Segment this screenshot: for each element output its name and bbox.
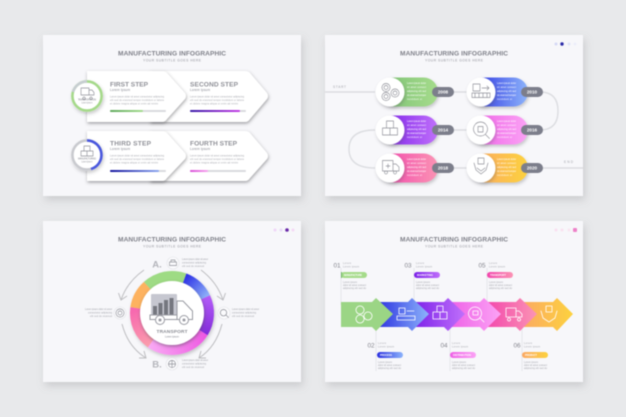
segment: green (144, 271, 186, 290)
card: fourth step (150, 131, 268, 181)
card: second step: SECOND STEP (190, 82, 239, 88)
item: 2018: Lorem ipsum dolor (407, 158, 426, 161)
callout: right magnifier: consectetur adipiscing (232, 312, 257, 314)
callout: 03 (404, 262, 440, 290)
callout: 02: dolor sit amet consect (378, 364, 401, 367)
title: panel 4: MANUFACTURING INFOGRAPHIC (400, 236, 508, 244)
item: 2020: 2020 (527, 166, 538, 171)
segment: purple (198, 295, 214, 335)
panel: arrow process (325, 221, 583, 382)
arrow 6: yellow (520, 298, 573, 331)
vertical leader lines (341, 268, 522, 371)
page dots: panel 3 (274, 228, 294, 232)
card: second step (150, 71, 268, 122)
callout: 02: 02 (367, 342, 375, 350)
item: 2010: Lorem ipsum dolor (497, 82, 516, 85)
callout: 02: Lorem ipsum (378, 346, 394, 348)
callout: 05: Lorem ipsum (489, 266, 505, 268)
item: 2008: do eiusmod tempor (407, 94, 426, 97)
callout: 05: TRANSPORT (490, 273, 506, 277)
item: 2008 (376, 78, 454, 106)
card: second step: Lorem Ipsum (190, 88, 210, 92)
card: first step (87, 71, 186, 122)
item: 2010: 2010 (527, 90, 538, 95)
badge: manufacturing: Lorem ipsum (82, 160, 93, 164)
item: 2020: Lorem ipsum dolor (497, 158, 516, 161)
icon: truck with bars (150, 294, 192, 324)
callout: 03: Lorem ipsum (416, 281, 430, 284)
item: 2018: 2018 (438, 166, 449, 171)
segment: blue (183, 274, 210, 300)
callout: 01: 01 (333, 262, 341, 270)
item: 2020: do eiusmod tempor (497, 170, 516, 173)
card: third step: et dolore magna aliqua ut enim ad minim (110, 162, 158, 164)
card: second step: Lorem ipsum dolor sit amet consectetur adipiscing (190, 96, 245, 98)
item: 2010: sit amet consect (497, 86, 516, 89)
card: second step: et dolore magna aliqua ut enim ad minim (190, 102, 238, 106)
item: 2014: sit amet consect (407, 124, 426, 127)
callout: 02: Lorem ipsum (378, 361, 392, 364)
callout: 03: adipiscing elit sed do (416, 287, 440, 290)
card: fourth step: elit sed do eiusmod tempor incididunt ut labore (190, 158, 245, 161)
item: 2016: Lorem ipsum dolor (497, 120, 516, 123)
callout: 02 (367, 342, 403, 370)
callout: left gear: Lorem ipsum dolor sit amet (85, 308, 112, 311)
item: 2018 (376, 154, 454, 182)
callout: A: A. (152, 260, 162, 270)
callout: 06: Lorem ipsum (524, 361, 538, 364)
arrow 1: green (341, 298, 393, 331)
page dots: panel 4 (554, 228, 577, 232)
timeline connector (325, 92, 583, 168)
subtitle: panel 4: YOUR SUBTITLE GOES HERE (425, 244, 484, 248)
callout: 05: Lorem ipsum (489, 281, 503, 284)
item: 2016: incididunt ut (497, 136, 512, 139)
icon: conveyor (397, 308, 415, 320)
callout: 04: adipiscing elit sed do (452, 367, 476, 370)
item: 2008: sit amet consect (407, 86, 426, 89)
callout: 04: 04 (440, 342, 448, 350)
item: 2008: Lorem ipsum dolor (407, 82, 426, 85)
center label: Lorem ipsum (165, 334, 179, 338)
callout: 01: adipiscing elit sed do (343, 287, 367, 290)
title: panel 2: MANUFACTURING INFOGRAPHIC (400, 50, 508, 58)
arrow 2: blue (376, 298, 429, 331)
item: 2014: do eiusmod tempor (407, 132, 426, 135)
item: 2018: do eiusmod tempor (407, 170, 426, 173)
callout: left gear: consectetur adipiscing (88, 312, 113, 314)
segment: magenta (148, 329, 208, 355)
callout: 05 (478, 262, 513, 290)
badge: manufacturing: MANUFACTURING (78, 158, 96, 160)
callout: B (152, 358, 208, 370)
callout: 05: 05 (478, 262, 486, 270)
callout: A: consectetur adipiscing (182, 262, 207, 264)
item: 2008: incididunt ut (407, 98, 422, 101)
item: 2020: incididunt ut (497, 174, 512, 177)
card: fourth step: et dolore magna aliqua ut enim ad minim (190, 162, 238, 164)
title: panel 3: MANUFACTURING INFOGRAPHIC (118, 236, 226, 244)
item: 2018: sit amet consect (407, 162, 426, 165)
callout: 04: Lorem (452, 342, 460, 345)
callout: 01 (333, 262, 367, 290)
icon: gears (356, 306, 372, 323)
card: third step: Lorem Ipsum (110, 147, 130, 151)
arrow: top right (201, 270, 226, 300)
callout: 06: 06 (513, 342, 521, 350)
card: first step: elit sed do eiusmod tempor incididunt ut labore (110, 99, 165, 102)
item: 2008: 2008 (438, 90, 449, 95)
callout: 06: Lorem (524, 342, 532, 345)
badge: manufacturing (71, 139, 103, 171)
center disc (140, 281, 204, 345)
item: 2008: adipiscing elit sed (407, 90, 427, 93)
panel: four steps (43, 35, 301, 196)
callout: 04: dolor sit amet consect (452, 364, 475, 367)
label: end: END (564, 160, 574, 164)
callout: 04: Lorem ipsum (452, 346, 468, 348)
callout: A: elit sed do eiusmod (182, 265, 205, 268)
badge: transportation: Lorem ipsum (82, 102, 93, 104)
item: 2010 (466, 78, 543, 106)
subtitle: panel 1: YOUR SUBTITLE GOES HERE (143, 58, 202, 62)
panel: transport cycle (43, 221, 301, 382)
callout: 01: MANUFACTURE (344, 273, 362, 277)
item: 2020 (466, 154, 543, 182)
callout: 04: DISTRIBUTION (453, 353, 471, 357)
title: panel 1: MANUFACTURING INFOGRAPHIC (118, 50, 226, 58)
callout: left gear: elit sed do eiusmod (90, 315, 113, 318)
label: start: START (333, 85, 346, 89)
item: 2016: adipiscing elit sed (497, 128, 517, 131)
item: 2010: do eiusmod tempor (497, 94, 516, 97)
callout: B: B. (152, 360, 162, 370)
page dots: panel 2 (554, 42, 576, 46)
callout: 04 (440, 342, 476, 370)
callout: 02: adipiscing elit sed do (378, 367, 402, 370)
item: 2014: adipiscing elit sed (407, 128, 427, 131)
card: fourth step: FOURTH STEP (190, 140, 238, 148)
item: 2020: sit amet consect (497, 162, 516, 165)
callout: left gear (85, 307, 126, 319)
item: 2014 (376, 116, 454, 144)
item: 2010: incididunt ut (497, 98, 512, 101)
callout: 06 (513, 342, 548, 370)
item: 2014: incididunt ut (407, 136, 422, 139)
callout: 01: Lorem ipsum (343, 266, 359, 268)
callout: 02: Lorem (378, 342, 386, 345)
badge: transportation (71, 80, 103, 112)
callout: right magnifier: elit sed do eiusmod (232, 315, 255, 318)
callout: 06: PRODUCT (525, 353, 537, 357)
arrow: bottom left (122, 324, 146, 358)
item: 2010: adipiscing elit sed (497, 90, 517, 93)
center label: TRANSPORT (156, 329, 188, 335)
item: 2016: sit amet consect (497, 124, 516, 127)
callout: 03: MARKETING (417, 273, 433, 277)
icon: box in hands (541, 306, 557, 322)
item: 2016: do eiusmod tempor (497, 132, 516, 135)
segment: orange (130, 282, 151, 309)
ring chart (130, 271, 214, 355)
item: 2016 (466, 116, 543, 144)
card: second step: elit sed do eiusmod tempor incididunt ut labore (190, 99, 245, 102)
item: 2020: adipiscing elit sed (497, 166, 517, 169)
arrow 4: magenta (448, 298, 501, 331)
arrow 5: pink (484, 298, 537, 331)
callout: B: consectetur adipiscing (182, 362, 207, 366)
arrow band (341, 298, 573, 331)
icon: magnifier (469, 307, 484, 322)
callout: 02: PROCESS (380, 353, 392, 357)
callout: 05: dolor sit amet consect (489, 284, 512, 287)
callout: A: Lorem ipsum dolor sit amet (182, 258, 208, 261)
callout: 03: Lorem (416, 262, 424, 265)
badge: transportation: TRANSPORTATION (78, 98, 96, 102)
item: 2014: Lorem ipsum dolor (407, 120, 426, 123)
card: third step: elit sed do eiusmod tempor incididunt ut labore (110, 158, 165, 161)
callout: 05: adipiscing elit sed do (489, 287, 513, 290)
subtitle: panel 3: YOUR SUBTITLE GOES HERE (143, 244, 202, 248)
icon: boxes (433, 306, 447, 319)
item: 2018: adipiscing elit sed (407, 166, 427, 169)
callout: 03: dolor sit amet consect (416, 284, 439, 287)
callout: B: elit sed do eiusmod (182, 366, 205, 369)
arrow: top left (118, 270, 144, 300)
callout: 03: 03 (404, 262, 412, 270)
item: 2016: 2016 (527, 128, 538, 133)
icon: delivery truck (506, 308, 522, 321)
card: first step: FIRST STEP (110, 82, 149, 88)
center label (156, 329, 188, 338)
item: 2018: incididunt ut (407, 174, 422, 177)
arrow: bottom right (199, 324, 222, 358)
callout: A (152, 257, 208, 270)
callout: 06: Lorem ipsum (524, 346, 540, 348)
card: fourth step: Lorem ipsum dolor sit amet consectetur adipiscing (190, 154, 245, 158)
subtitle: panel 2: YOUR SUBTITLE GOES HERE (425, 58, 484, 62)
callout: right magnifier (218, 307, 259, 319)
card: third step: THIRD STEP (110, 140, 152, 148)
callout: 01: Lorem ipsum (343, 281, 357, 284)
card: third step: Lorem ipsum dolor sit amet consectetur adipiscing (110, 154, 165, 158)
card: third step (87, 131, 186, 181)
card: first step: Lorem Ipsum (110, 88, 130, 92)
callout: right magnifier: Lorem ipsum dolor sit amet (232, 308, 259, 311)
callout: 06: dolor sit amet consect (524, 364, 547, 367)
segment: pink (130, 307, 154, 347)
arrow 3: purple (412, 298, 465, 331)
item: 2014: 2014 (438, 128, 449, 133)
callout: 05: Lorem (489, 262, 497, 265)
callout: 06: adipiscing elit sed do (524, 367, 548, 370)
card: first step: et dolore magna aliqua ut enim ad minim (110, 102, 158, 106)
card: fourth step: Lorem Ipsum (190, 147, 210, 151)
callout: 04: Lorem ipsum (452, 361, 466, 364)
card: first step: Lorem ipsum dolor sit amet consectetur adipiscing (110, 96, 165, 98)
callout: 03: Lorem ipsum (416, 266, 432, 268)
callout: 01: dolor sit amet consect (343, 284, 366, 287)
callout: 01: Lorem (343, 262, 351, 265)
panel: timeline (325, 35, 583, 196)
callout: B: Lorem ipsum dolor sit amet (182, 359, 208, 362)
